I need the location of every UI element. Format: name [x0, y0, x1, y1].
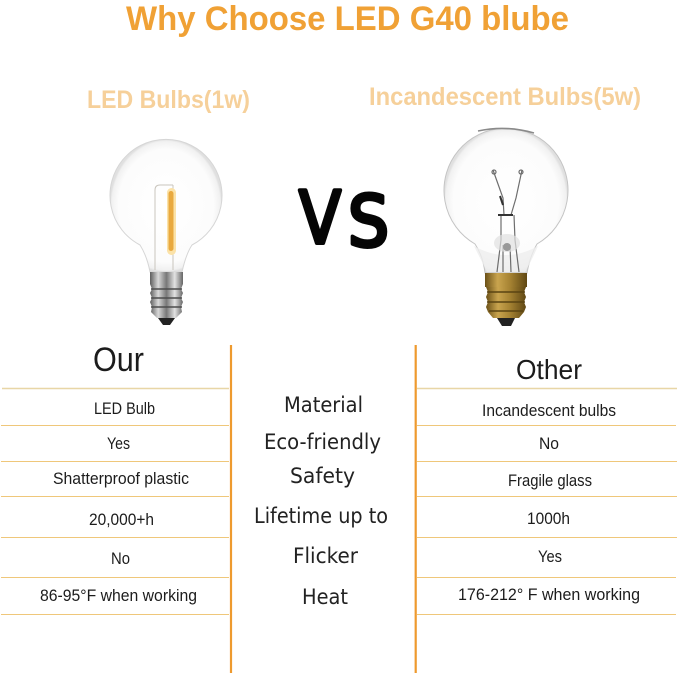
our values: No	[111, 550, 130, 568]
other values: Fragile glass	[508, 472, 592, 490]
icon: LED bulb	[110, 139, 222, 325]
feature labels: Flicker	[293, 544, 358, 568]
our values	[40, 400, 197, 605]
icon: incandescent bulb	[444, 128, 568, 326]
title: Why Choose LED G40 blube	[126, 0, 569, 38]
other values: 1000h	[527, 510, 570, 528]
heading: incandescent bulbs: Incandescent Bulbs(5w)	[369, 83, 641, 111]
comparison table	[1, 341, 677, 673]
other values	[458, 402, 640, 604]
feature labels	[254, 393, 388, 609]
our values: 20,000+h	[89, 511, 154, 529]
heading: LED bulbs: LED Bulbs(1w)	[87, 86, 250, 114]
our values: LED Bulb	[94, 400, 155, 418]
text: VS: S	[348, 181, 389, 263]
our values: Yes	[107, 435, 130, 453]
feature labels: Lifetime up to	[254, 504, 388, 528]
feature labels: Eco-friendly	[264, 430, 381, 454]
feature labels: Heat	[302, 585, 348, 609]
column heading: Our: Our	[93, 341, 144, 379]
our values: Shatterproof plastic	[53, 470, 189, 488]
feature labels: Material	[284, 393, 363, 417]
text: VS: V	[299, 176, 341, 260]
our values: 86-95°F when working	[40, 587, 197, 605]
other values: Yes	[538, 548, 562, 566]
other values: No	[539, 435, 559, 453]
other values: Incandescent bulbs	[482, 402, 616, 420]
column heading: Other: Other	[516, 354, 582, 385]
other values: 176-212° F when working	[458, 586, 640, 604]
feature labels: Safety	[290, 464, 355, 488]
text: VS	[299, 176, 389, 263]
